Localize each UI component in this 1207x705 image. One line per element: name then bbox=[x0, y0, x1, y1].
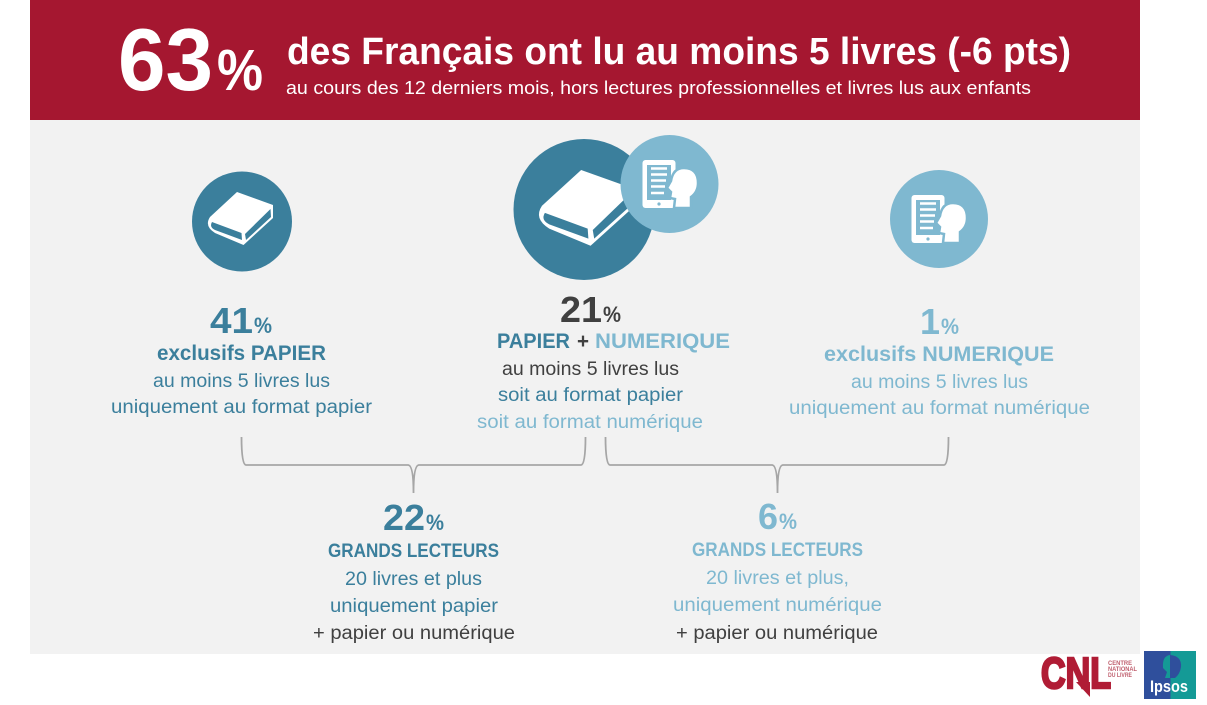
icon: digital reader bbox=[890, 170, 988, 268]
headline figure 63% bbox=[118, 10, 263, 109]
logo: Ipsos: Ipsos bbox=[1150, 677, 1188, 696]
logo: CNL: NATIONAL bbox=[1108, 667, 1137, 673]
text block: exclusive paper bbox=[111, 300, 373, 418]
text block: heavy readers paper: uniquement papier bbox=[330, 596, 499, 617]
icon: paper book bbox=[192, 172, 292, 272]
text block: exclusive digital: 1 bbox=[920, 301, 940, 342]
text block: heavy readers digital bbox=[673, 496, 882, 644]
text block: exclusive digital: % bbox=[941, 314, 959, 339]
text block: exclusive paper: au moins 5 livres lus bbox=[153, 371, 330, 392]
text block: heavy readers digital: 6 bbox=[758, 496, 778, 537]
text block: exclusive paper: exclusifs PAPIER bbox=[157, 342, 326, 365]
headline figure 63%: 63 bbox=[118, 10, 213, 109]
logo: CNL: CENTRE bbox=[1108, 661, 1132, 667]
logo: CNL: CNL bbox=[1041, 649, 1111, 698]
text block: exclusive paper: 41 bbox=[210, 300, 253, 341]
text block: exclusive digital: au moins 5 livres lus bbox=[851, 372, 1028, 393]
text block: exclusive paper: uniquement au format papier bbox=[111, 397, 373, 418]
headline figure 63%: % bbox=[217, 38, 263, 103]
text block: exclusive digital: uniquement au format numérique bbox=[789, 398, 1090, 419]
text block: heavy readers digital: uniquement numérique bbox=[673, 595, 882, 616]
text block: heavy readers paper: + papier ou numérique bbox=[313, 623, 515, 644]
text block: paper and digital: % bbox=[603, 302, 621, 327]
bracket: paper readers bbox=[242, 437, 586, 493]
text block: paper and digital: soit au format numérique bbox=[477, 412, 703, 433]
text block: paper and digital: + bbox=[577, 330, 589, 353]
text block: exclusive paper: % bbox=[254, 313, 272, 338]
subheading: au cours des 12 derniers mois, hors lectures professionnelles et livres lus aux enfants bbox=[286, 78, 1031, 98]
text block: paper and digital: 21 bbox=[560, 289, 602, 330]
text block: exclusive digital bbox=[789, 301, 1090, 419]
text block: heavy readers digital: + papier ou numérique bbox=[676, 623, 878, 644]
text block: heavy readers digital: GRANDS LECTEURS bbox=[692, 540, 863, 561]
text block: heavy readers paper: 22 bbox=[383, 497, 425, 538]
text block: paper and digital: soit au format papier bbox=[498, 385, 684, 406]
text block: paper and digital bbox=[477, 289, 730, 433]
text block: heavy readers digital: 20 livres et plus, bbox=[706, 568, 849, 589]
panel: grey background bbox=[30, 120, 1140, 654]
icon: paper and digital bbox=[514, 135, 718, 280]
logo: Ipsos bbox=[1144, 651, 1196, 699]
text block: heavy readers paper: % bbox=[426, 510, 444, 535]
text block: paper and digital: NUMERIQUE bbox=[595, 330, 730, 353]
bracket: digital readers bbox=[606, 437, 948, 493]
header banner bbox=[30, 0, 1140, 120]
text block: paper and digital: PAPIER bbox=[497, 330, 570, 353]
text block: heavy readers paper bbox=[313, 497, 515, 644]
text block: paper and digital: au moins 5 livres lus bbox=[502, 359, 679, 380]
text block: exclusive digital: exclusifs NUMERIQUE bbox=[824, 343, 1054, 366]
text block: heavy readers paper: 20 livres et plus bbox=[345, 569, 482, 590]
logo: CNL: DU LIVRE bbox=[1108, 673, 1132, 679]
text block: heavy readers paper: GRANDS LECTEURS bbox=[328, 541, 499, 562]
heading: des Français ont lu au moins 5 livres (-6 pts) bbox=[287, 31, 1071, 73]
text block: heavy readers digital: % bbox=[779, 509, 797, 534]
